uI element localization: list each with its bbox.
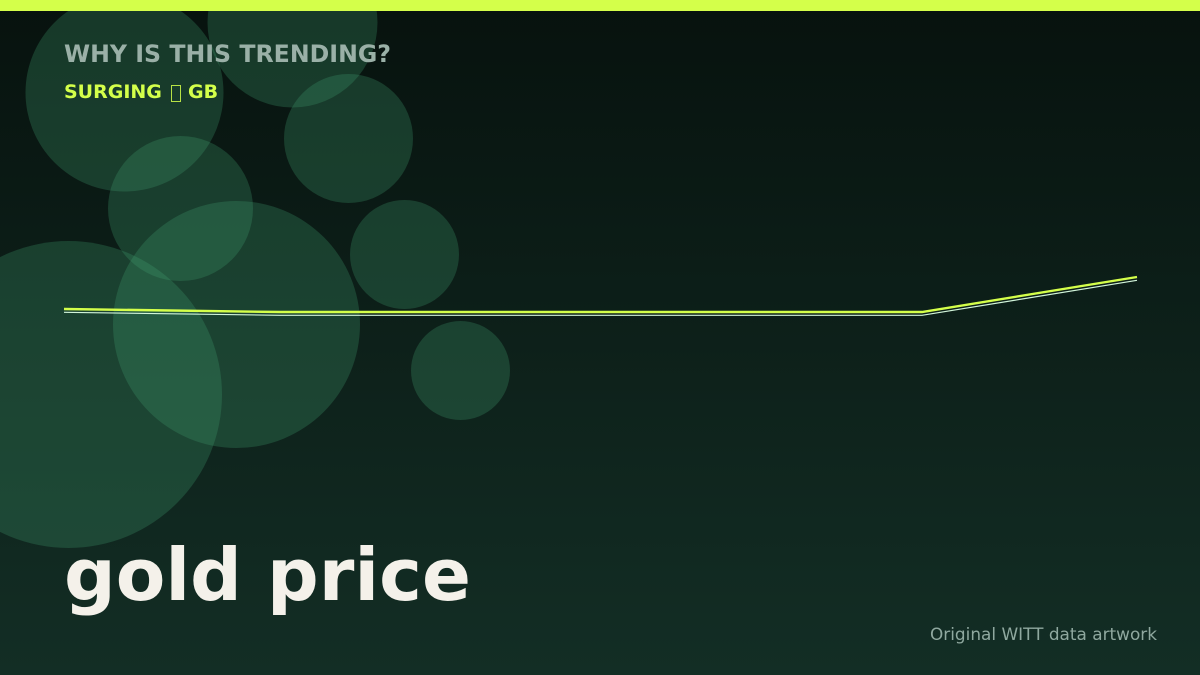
trend line: primary bbox=[64, 277, 1137, 312]
status label: SURGING bbox=[64, 81, 162, 103]
trend line: secondary bbox=[64, 280, 1137, 315]
credit: Original WITT data artwork bbox=[930, 625, 1157, 645]
bubble cluster bbox=[0, 0, 510, 548]
top accent bar bbox=[0, 0, 1200, 11]
eyebrow heading: WHY IS THIS TRENDING? bbox=[64, 40, 391, 68]
status label bbox=[64, 81, 218, 103]
main title: gold price bbox=[64, 533, 471, 617]
status label: GB bbox=[188, 81, 218, 103]
